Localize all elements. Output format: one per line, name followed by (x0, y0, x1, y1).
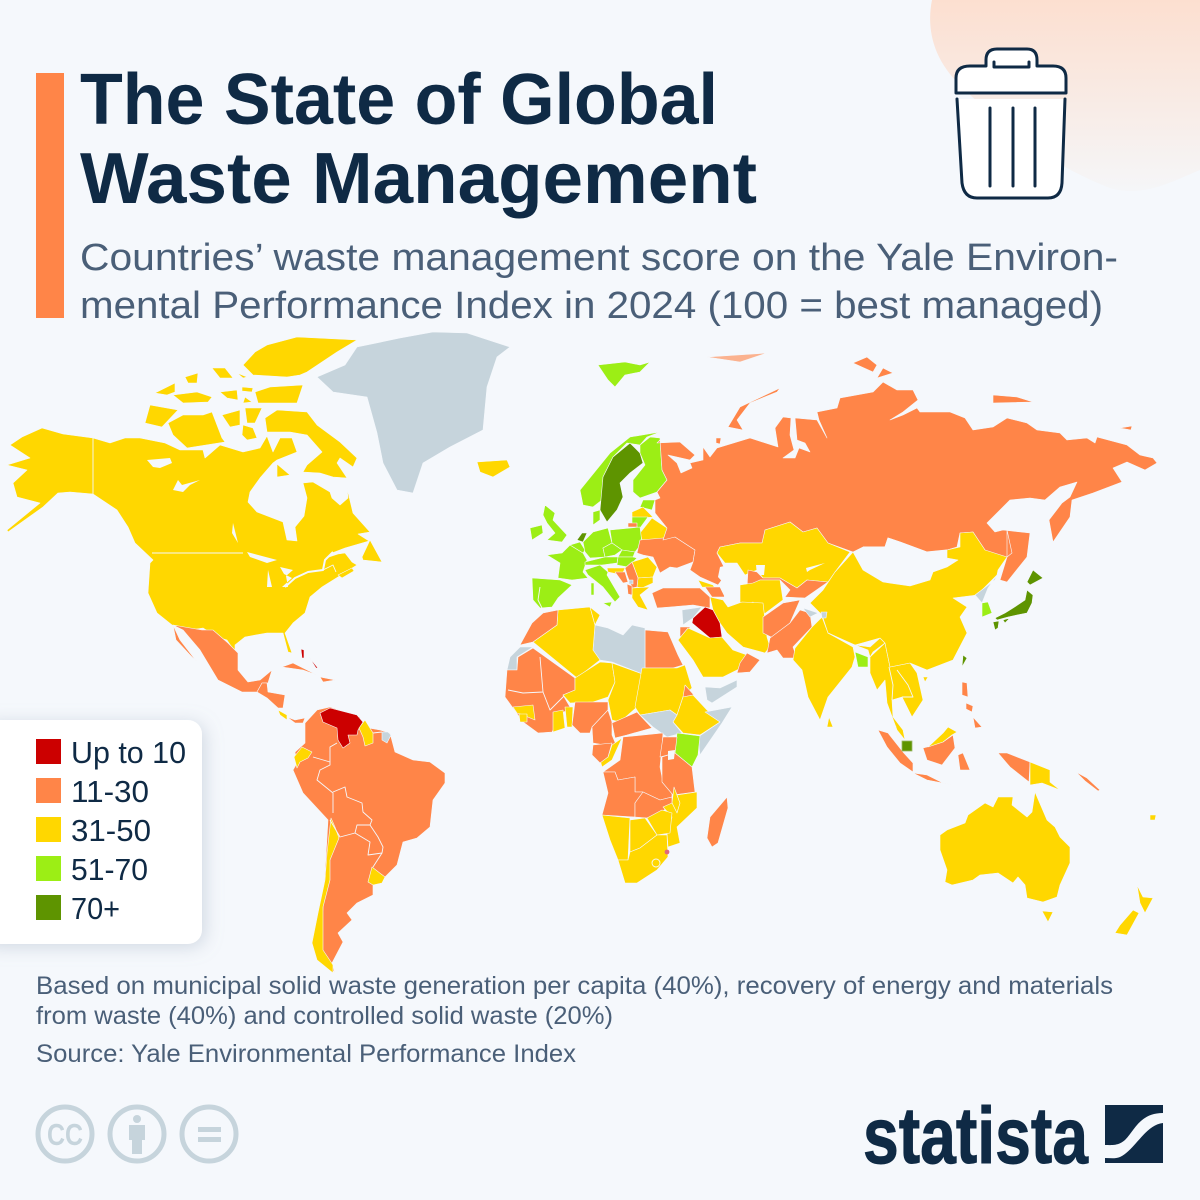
map: South and East Asia (793, 532, 1043, 740)
legend panel (0, 720, 202, 944)
map: Europe (530, 432, 695, 610)
legend labels: 31-50 (71, 813, 151, 848)
subtitle: Countries’ waste management score on the Yale Environ- (80, 237, 1118, 279)
title: The State of Global (80, 60, 718, 140)
subtitle (80, 237, 1118, 327)
map: Central Asia and Caucasus (652, 522, 850, 658)
methodology note: from waste (40%) and controlled solid waste (20%) (36, 1002, 613, 1030)
map: Africa (505, 607, 732, 883)
icon: creative commons (38, 1107, 92, 1161)
legend swatches (36, 739, 61, 920)
map: North America (7, 337, 382, 653)
title: Waste Management (80, 139, 757, 219)
statista wordmark: statista (863, 1091, 1088, 1180)
map: Middle East (678, 607, 760, 703)
map: Iceland (477, 460, 510, 477)
legend labels (71, 735, 186, 926)
map: Russia (655, 353, 1157, 585)
icon: attribution (110, 1107, 164, 1161)
source: Source: Yale Environmental Performance Index (36, 1040, 577, 1068)
map: Greenland (317, 332, 510, 493)
map: Svalbard (598, 362, 650, 387)
statista logo mark (1105, 1105, 1163, 1163)
legend labels: 70+ (71, 891, 120, 926)
legend labels: 11-30 (71, 774, 149, 809)
icon: trash can (956, 49, 1066, 198)
title (80, 60, 757, 219)
accent bar (36, 73, 64, 318)
world map (7, 332, 1157, 973)
methodology note (36, 972, 1113, 1030)
map: Southeast Asia and Oceania (878, 727, 1156, 935)
legend labels: Up to 10 (71, 735, 186, 770)
map: South America (293, 707, 445, 973)
subtitle: mental Performance Index in 2024 (100 = best managed) (80, 285, 1103, 327)
icon: no derivatives (182, 1107, 236, 1161)
decorative peach blob (930, 0, 1200, 191)
legend labels: 51-70 (71, 852, 148, 887)
map: Mexico and Central America (173, 625, 335, 723)
methodology note: Based on municipal solid waste generation per capita (40%), recovery of energy and materials (36, 972, 1113, 1000)
icon: creative commons: CC (47, 1117, 83, 1152)
